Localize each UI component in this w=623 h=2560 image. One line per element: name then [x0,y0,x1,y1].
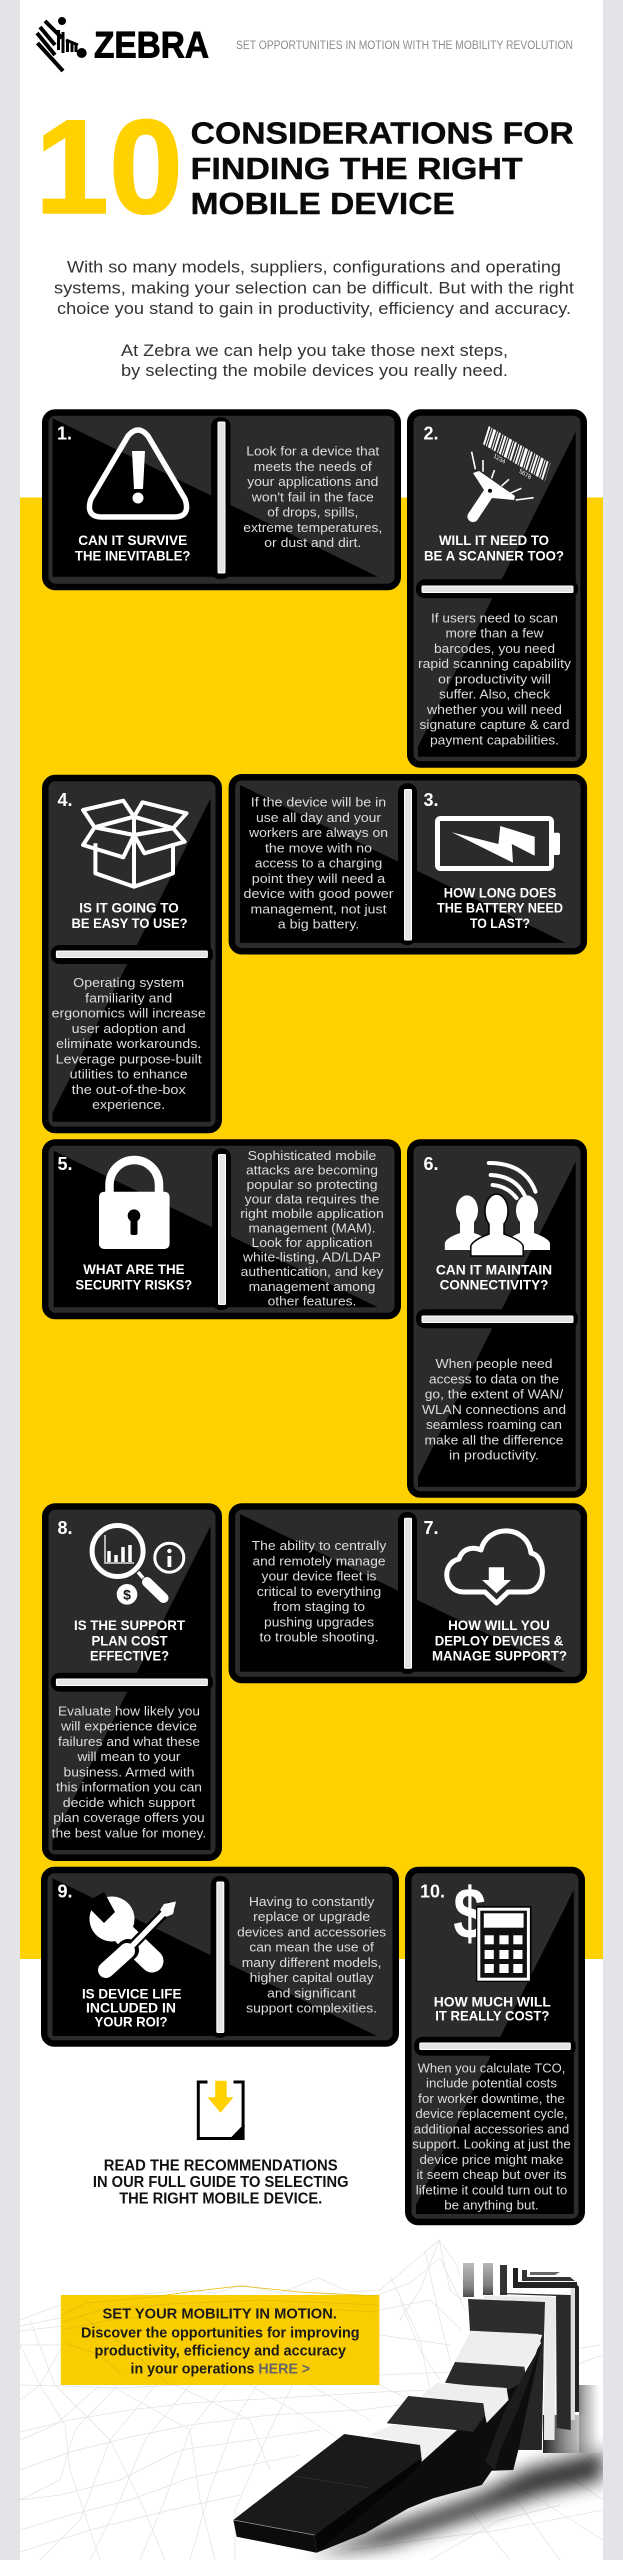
heading: IS IT GOING TO [79,900,179,916]
body text: eliminate workarounds. [56,1036,201,1051]
body text: access to data on the [429,1371,559,1386]
icon: battery [438,818,560,868]
icon: dollar and calculator [453,1874,532,1982]
body text: workers are always on [248,825,388,840]
body text: other features. [268,1293,356,1308]
heading: HOW WILL YOU [448,1617,550,1633]
heading: CAN IT SURVIVE [78,532,187,548]
body text: access to a charging [255,856,382,871]
body text: or dust and dirt. [264,535,361,550]
body text: the best value for money. [52,1825,206,1840]
body text: attacks are becoming [246,1162,378,1178]
body text: your applications and [247,474,378,489]
heading [82,1985,181,2030]
tagline: SET OPPORTUNITIES IN MOTION WITH THE MOBILITY REVOLUTION [236,40,573,52]
body text: management among [249,1279,375,1294]
icon: barcode scanner [467,435,548,522]
body text: in productivity. [449,1448,539,1462]
body text: decide which support [63,1795,196,1810]
panel: card 8: 8. [58,1518,73,1538]
body text: The ability to centrally [252,1538,387,1553]
heading: EFFECTIVE? [90,1647,169,1663]
domino shadow [310,2450,603,2556]
body text: When people need [436,1356,552,1371]
heading: SECURITY RISKS? [76,1276,192,1292]
panel: card 2: 2. [424,424,439,444]
body text: point they will need a [252,871,386,886]
call to action: read the guide: IN OUR FULL GUIDE TO SELECTING [93,2174,348,2191]
heading: TO LAST? [470,915,530,931]
call to action box: productivity, efficiency and accuracy [95,2343,346,2359]
heading: THE INEVITABLE? [75,547,190,563]
body text: If users need to scan [431,610,558,625]
body text: more than a few [446,626,544,641]
body text: device with good power [244,886,394,901]
title: FINDING THE RIGHT [191,152,523,186]
body text: devices and accessories [237,1924,387,1939]
heading: PLAN COST [92,1632,168,1648]
body text: experience. [92,1097,165,1112]
body text [243,444,382,550]
body text: whether you will need [426,702,562,717]
intro text: by selecting the mobile devices you really need. [121,361,508,380]
heading: CAN IT MAINTAIN [436,1261,552,1277]
body text: payment capabilities. [430,732,559,747]
call to action: read the guide: READ THE RECOMMENDATIONS [104,2158,338,2175]
panel: card 4: 4. [58,790,73,810]
icon: cloud download [447,1531,542,1603]
body text: go, the extent of WAN/ [425,1386,564,1402]
body text [52,975,206,1112]
body text: include potential costs [426,2076,557,2091]
body text: additional accessories and [414,2121,569,2136]
body text: Having to constantly [249,1894,375,1909]
body text: Look for a device that [246,444,380,459]
intro text [54,258,574,380]
heading: YOUR ROI? [94,2014,168,2030]
body text: management (MAM). [248,1221,376,1236]
body text: signature capture & card [420,717,570,732]
body text: and remotely manage [252,1553,386,1568]
heading [75,532,190,563]
call to action: read the guide [93,2158,348,2208]
heading: IT REALLY COST? [435,2008,549,2024]
panel: card 6: 6. [424,1154,439,1174]
panel: card 5 [45,1142,398,1316]
body text: white-listing, AD/LDAP [242,1250,381,1265]
body text: can mean the use of [249,1940,374,1955]
body text: extreme temperatures, [243,520,382,535]
icon: magnifier with chart: $ [123,1586,131,1602]
body text: familiarity and [85,990,172,1005]
dominoes [233,2263,603,2556]
body text: for worker downtime, the [418,2091,565,2106]
body text: and significant [267,1985,356,2000]
body text: authentication, and key [241,1264,384,1279]
body text: device price might make [420,2152,564,2167]
body text: be anything but. [444,2198,539,2213]
body text: many different models, [242,1955,381,1970]
panel: card 2 [410,412,584,764]
heading: THE BATTERY NEED [437,900,563,916]
heading [432,1617,567,1663]
body text: suffer. Also, check [439,687,550,702]
body text: your device fleet is [262,1568,377,1584]
panel: card 5: 5. [58,1154,73,1174]
panel: card 1: 1. [57,424,72,444]
heading [424,532,564,563]
body text: critical to everything [257,1584,381,1599]
heading [437,884,563,931]
body text: your data requires the [245,1192,379,1207]
background wire mesh [20,2240,603,2560]
body text: make all the difference [424,1432,564,1447]
domino mass [317,2330,544,2553]
body text: use all day and your [256,810,382,825]
icon: open box [83,801,186,887]
body text [252,1538,387,1644]
panel: card 10 [408,1870,582,2222]
body text: right mobile application [240,1206,384,1221]
icon: barcode scanner: 1234 [493,453,506,466]
panel: card 8 [45,1506,219,1858]
body text: will experience device [60,1719,197,1734]
heading: CONNECTIVITY? [440,1277,548,1293]
body text: device replacement cycle, [415,2106,568,2121]
panel: card 3 [232,777,584,951]
heading: HOW MUCH WILL [434,1994,551,2010]
icon: warning triangle [89,430,187,517]
intro text: systems, making your selection can be difficult. But with the right [54,278,574,297]
icon: barcode scanner: 5678 [518,469,532,482]
logo wordmark: ZEBRA [94,24,209,66]
panel: card 3: 3. [424,790,439,810]
panel: card 6 [410,1142,584,1494]
heading: BE A SCANNER TOO? [424,547,564,563]
body text [237,1894,387,2016]
body text: support. Looking at just the [412,2137,571,2152]
body text: Sophisticated mobile [248,1148,376,1163]
body text: seamless roaming can [426,1417,562,1432]
body text: lifetime it could turn out to [416,2182,567,2197]
icon: document download [198,2081,245,2140]
icon: connected people [445,1163,550,1256]
heading: MANAGE SUPPORT? [432,1647,567,1663]
body text: from staging to [273,1599,365,1614]
intro text: With so many models, suppliers, configurations and operating [67,258,561,277]
icon: wrench and screwdriver [84,1892,176,1971]
body text: WLAN connections and [422,1402,566,1417]
body text: management, not just [250,902,387,916]
heading: IS THE SUPPORT [74,1617,185,1633]
panel: card 4 [45,778,219,1130]
body text: pushing upgrades [264,1614,374,1629]
big number 10: 10 [35,93,183,242]
body text: rapid scanning capability [418,656,571,671]
body text [52,1703,206,1840]
body text [418,610,571,747]
call to action box: in your operations HERE > [130,2361,310,2377]
call to action box: Discover the opportunities for improving [81,2325,360,2341]
heading: IS DEVICE LIFE [82,1985,181,2001]
call to action box [61,2286,379,2385]
body text [244,795,394,932]
body text: higher capital outlay [250,1970,374,1985]
body text: of drops, spills, [267,505,358,520]
body text: it seem cheap but over its [416,2167,567,2182]
body text: replace or upgrade [253,1909,370,1924]
title: MOBILE DEVICE [191,187,455,221]
body text: Evaluate how likely you [58,1703,200,1718]
panel: card 9 [44,1870,396,2044]
body text [240,1148,384,1308]
title [191,116,574,221]
body text: If the device will be in [251,795,386,810]
call to action: read the guide: THE RIGHT MOBILE DEVICE. [119,2191,322,2208]
body text: a big battery. [278,917,359,932]
heading: DEPLOY DEVICES & [435,1632,563,1648]
heading: WHAT ARE THE [83,1261,185,1277]
body text [422,1356,566,1462]
body text: user adoption and [72,1021,186,1036]
intro text: choice you stand to gain in productivity, efficiency and accuracy. [57,299,571,318]
panel: card 10: 10. [420,1882,445,1902]
body text: utilities to enhance [70,1066,188,1082]
body text: ergonomics will increase [52,1006,206,1020]
body text: Leverage purpose-built [56,1051,202,1066]
body text: will mean to your [76,1749,181,1764]
panel: card 7 [232,1506,584,1680]
heading [434,1994,551,2024]
logo: Zebra [37,17,209,71]
icon: dollar and calculator: $ [453,1874,486,1954]
body text [412,2060,571,2213]
call to action box: SET YOUR MOBILITY IN MOTION. [102,2307,337,2323]
heading: BE EASY TO USE? [72,915,188,931]
panel: card 9: 9. [58,1882,73,1902]
body text: won't fail in the face [251,489,374,504]
body text: When you calculate TCO, [418,2060,565,2075]
heading [436,1261,552,1293]
heading: HOW LONG DOES [444,884,556,900]
title: CONSIDERATIONS FOR [191,116,574,150]
panel: card 1 [45,412,398,587]
heading: WILL IT NEED TO [439,532,549,548]
body text: plan coverage offers you [53,1810,205,1825]
intro text: At Zebra we can help you take those next steps, [121,341,508,360]
body text: Operating system [73,975,184,990]
body text: meets the needs of [254,459,372,474]
body text: popular so protecting [246,1177,378,1192]
body text: business. Armed with [64,1764,194,1779]
heading: INCLUDED IN [86,1999,176,2015]
body text: the move with no [265,840,372,856]
body text: support complexities. [246,2000,377,2016]
icon: padlock [99,1160,170,1249]
heading [74,1617,185,1663]
body text: to trouble shooting. [260,1630,378,1644]
body text: barcodes, you need [434,641,555,656]
panel: card 7: 7. [424,1518,439,1538]
body text: or productivity will [438,671,551,686]
icon: magnifier with chart [92,1526,184,1605]
heading [76,1261,192,1292]
body text: the out-of-the-box [72,1082,186,1097]
body text: failures and what these [58,1734,200,1749]
body text: Look for application [252,1235,372,1250]
heading [72,900,188,931]
body text: this information you can [56,1780,202,1795]
